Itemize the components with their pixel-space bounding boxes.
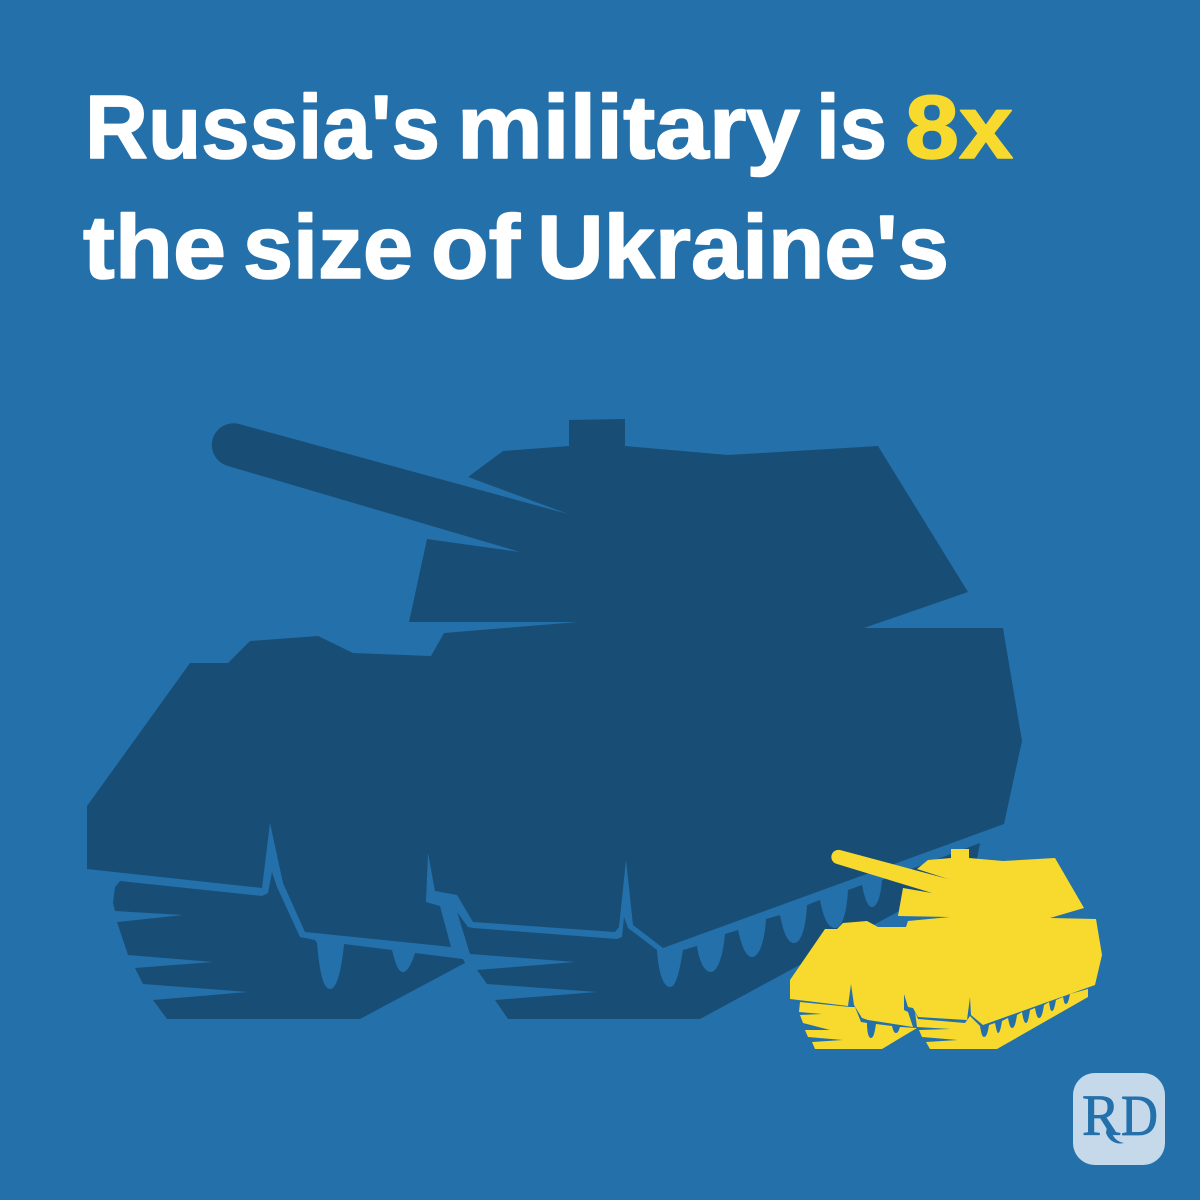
tank hull and turret [87, 419, 1022, 948]
logo: RD badge: D [1121, 1083, 1158, 1148]
right track [457, 843, 980, 1019]
right track [915, 989, 1088, 1049]
logo: RD badge [1073, 1073, 1165, 1165]
logo: RD badge: R [1082, 1083, 1120, 1148]
title: Russia's [85, 78, 440, 178]
icon: large dark tank representing Russia [87, 419, 1022, 1019]
left track [799, 1002, 917, 1049]
title: 8x [905, 78, 1013, 178]
title: military [457, 78, 800, 178]
left track [113, 872, 465, 1019]
title: size [243, 198, 413, 298]
title [83, 78, 1013, 298]
title: Ukraine's [537, 198, 949, 298]
tank hull and turret [790, 849, 1102, 1027]
title: is [816, 78, 887, 178]
title: of [431, 198, 521, 298]
icon: small yellow tank representing Ukraine [790, 849, 1102, 1049]
title: the [83, 198, 226, 298]
